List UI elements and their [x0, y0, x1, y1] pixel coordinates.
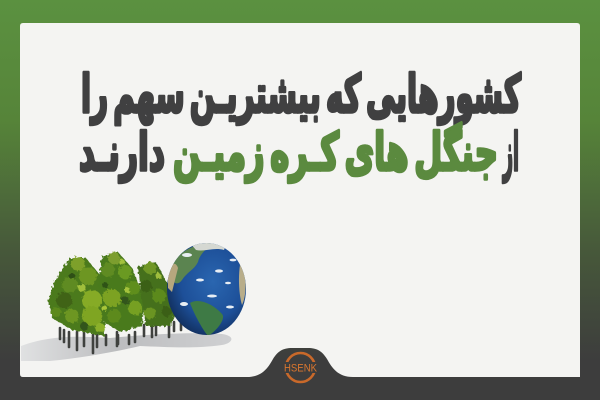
logo ring	[286, 353, 315, 382]
west coast land	[168, 264, 178, 292]
south america	[190, 301, 223, 336]
arctic ice	[192, 243, 225, 250]
ground shadow	[21, 333, 231, 361]
globe	[167, 240, 246, 336]
heading line 2 end: دارنـد	[79, 123, 165, 183]
illustration: trees and globe	[21, 240, 246, 361]
text: از	[502, 123, 519, 183]
tree canopies	[48, 258, 106, 336]
heading	[79, 65, 521, 183]
tree foliage	[48, 252, 176, 336]
logo background strip	[283, 362, 318, 373]
north america	[170, 243, 210, 283]
clouds	[180, 253, 236, 308]
europe africa edge	[239, 265, 246, 305]
tree trunks	[60, 322, 181, 353]
logo text: HSENK	[284, 362, 318, 374]
logo	[283, 353, 318, 382]
